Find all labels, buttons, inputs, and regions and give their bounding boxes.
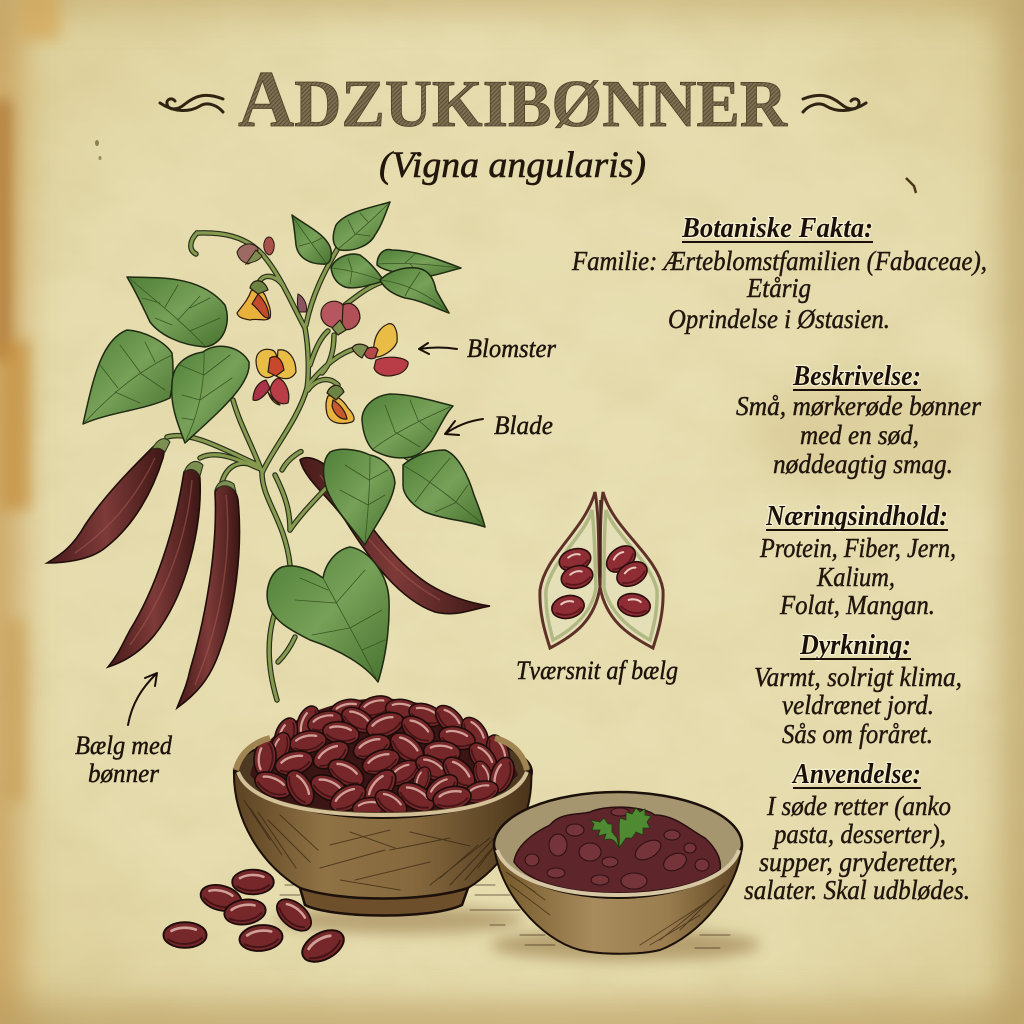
- title text: ADZUKIBØNNER: [238, 56, 788, 144]
- section: Næringsindhold: Kalium,: [816, 562, 895, 592]
- section: Anvendelse: salater. Skal udblødes.: [744, 875, 970, 905]
- hanging flower lower: [326, 385, 354, 423]
- arrow: to pods: [128, 673, 157, 725]
- subtitle: (Vigna angularis): [379, 145, 646, 186]
- section: Dyrkning: Sås om foråret.: [782, 719, 933, 749]
- bowl body: [234, 768, 531, 916]
- right flower: [352, 324, 408, 376]
- label: pods with beans: bønner: [88, 759, 160, 788]
- pods hanging: [47, 439, 239, 708]
- label: pods with beans: Bælg med: [75, 731, 173, 760]
- section: Botaniske Fakta: Familie: Ærteblomstfamilien (Fabaceae),: [571, 246, 987, 276]
- section: Beskrivelse: Beskrivelse:: [792, 360, 921, 392]
- hanging flower left: [237, 281, 271, 320]
- title ornament right: [803, 95, 866, 112]
- label: Blade: Blade: [494, 411, 553, 440]
- bowl interior: [494, 792, 742, 898]
- stems: [167, 233, 420, 700]
- label: Blade: [445, 411, 553, 440]
- section: Dyrkning: [754, 629, 962, 749]
- tendril and buds: [237, 237, 307, 312]
- ground shadows: [275, 885, 760, 961]
- section: Dyrkning: Dyrkning:: [799, 629, 911, 661]
- large bowl of beans: [234, 692, 532, 916]
- small bowl of paste: [494, 792, 742, 954]
- section: Anvendelse: supper, gryderetter,: [759, 847, 958, 877]
- section: Beskrivelse: [736, 360, 981, 479]
- plant illustration: [47, 202, 490, 708]
- section: Dyrkning: Varmt, solrigt klima,: [754, 662, 962, 692]
- bowl body: [494, 845, 742, 954]
- section: Beskrivelse: med en sød,: [800, 420, 919, 450]
- bean paste: [514, 807, 720, 893]
- section: Dyrkning: veldrænet jord.: [782, 690, 934, 720]
- center flower: [253, 349, 296, 405]
- section: Botaniske Fakta: Etårig: [746, 273, 811, 303]
- cilantro garnish: [590, 808, 651, 848]
- label: pods with beans: [75, 673, 173, 788]
- section: Beskrivelse: nøddeagtig smag.: [773, 449, 953, 479]
- section: Beskrivelse: Små, mørkerøde bønner: [736, 391, 981, 421]
- label: Blomster: Blomster: [467, 334, 557, 363]
- beans in bowl: [250, 692, 519, 822]
- section: Anvendelse: Anvendelse:: [791, 758, 921, 790]
- loose beans: [163, 870, 349, 968]
- bowl back: [234, 728, 532, 816]
- section: Anvendelse: I søde retter (anko: [766, 791, 951, 821]
- pods behind: [300, 458, 490, 614]
- label: Blomster: [419, 334, 557, 363]
- section: Botaniske Fakta: [571, 212, 987, 334]
- pod cross-section: [540, 492, 663, 648]
- section: Næringsindhold: Protein, Fiber, Jern,: [759, 533, 956, 563]
- flowers: [237, 281, 408, 423]
- leaves: [83, 202, 485, 682]
- pink flower: [321, 301, 360, 335]
- arrow: to flowers: [419, 343, 457, 354]
- section: Botaniske Fakta: Oprindelse i Østasien.: [668, 304, 890, 334]
- section: Anvendelse: pasta, desserter),: [772, 819, 946, 849]
- section: Næringsindhold: Næringsindhold:: [765, 500, 948, 532]
- section: Næringsindhold: Folat, Mangan.: [779, 590, 935, 620]
- label: cross-section: Tværsnit af bælg: [516, 656, 678, 685]
- section: Botaniske Fakta: Botaniske Fakta:: [681, 212, 873, 244]
- title ornament left: [160, 95, 223, 112]
- section: Næringsindhold: [759, 500, 956, 620]
- arrow: to leaves: [445, 419, 483, 435]
- section: Anvendelse: [744, 758, 970, 905]
